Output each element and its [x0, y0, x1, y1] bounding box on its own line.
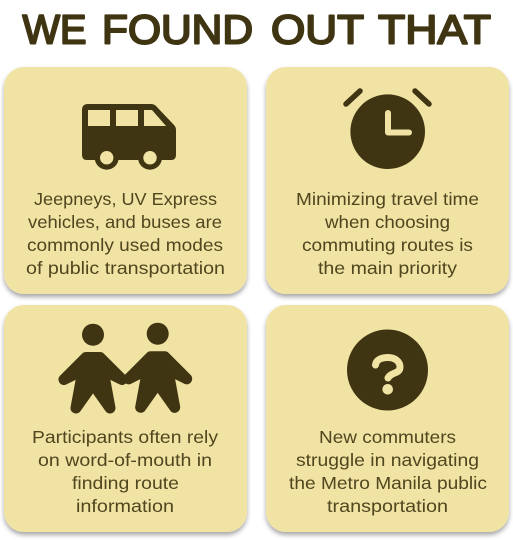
panel: travel time priority: [266, 67, 509, 294]
title: [22, 6, 491, 52]
text: transport modes: [26, 189, 225, 278]
text: word of mouth: [32, 427, 218, 516]
icon: right person: [129, 323, 187, 407]
icon: left person: [64, 324, 122, 408]
text: new commuters: New commuters: [319, 427, 456, 447]
text: word of mouth: Participants often rely: [32, 427, 218, 447]
text: new commuters: struggle in navigating: [296, 450, 479, 470]
text: travel time: the main priority: [318, 258, 457, 278]
text: transport modes: of public transportation: [26, 258, 225, 278]
panel: common transport modes: [4, 67, 247, 294]
panel: new commuters: [266, 305, 509, 532]
text: travel time: when choosing: [324, 212, 450, 232]
text: new commuters: the Metro Manila public: [289, 473, 487, 493]
text: new commuters: [289, 427, 487, 516]
icon: alarm clock: [346, 91, 429, 169]
title: WE: [22, 6, 86, 52]
text: transport modes: commonly used modes: [27, 235, 223, 255]
text: new commuters: transportation: [327, 496, 448, 516]
text: word of mouth: finding route: [72, 473, 179, 493]
text: word of mouth: information: [76, 496, 174, 516]
text: travel time: Minimizing travel time: [296, 189, 479, 209]
text: transport modes: Jeepneys, UV Express: [34, 189, 217, 209]
icon: question mark: [347, 330, 428, 410]
text: travel time: [296, 189, 479, 278]
title: OUT: [271, 6, 364, 52]
text: travel time: commuting routes is: [302, 235, 473, 255]
text: transport modes: vehicles, and buses are: [28, 212, 222, 232]
text: word of mouth: on word-of-mouth in: [38, 450, 212, 470]
icon: bus: [82, 104, 176, 170]
title: THAT: [378, 6, 491, 52]
title: FOUND: [102, 6, 253, 52]
icon: two people holding hands: [64, 323, 187, 408]
panel: word of mouth: [4, 305, 247, 532]
